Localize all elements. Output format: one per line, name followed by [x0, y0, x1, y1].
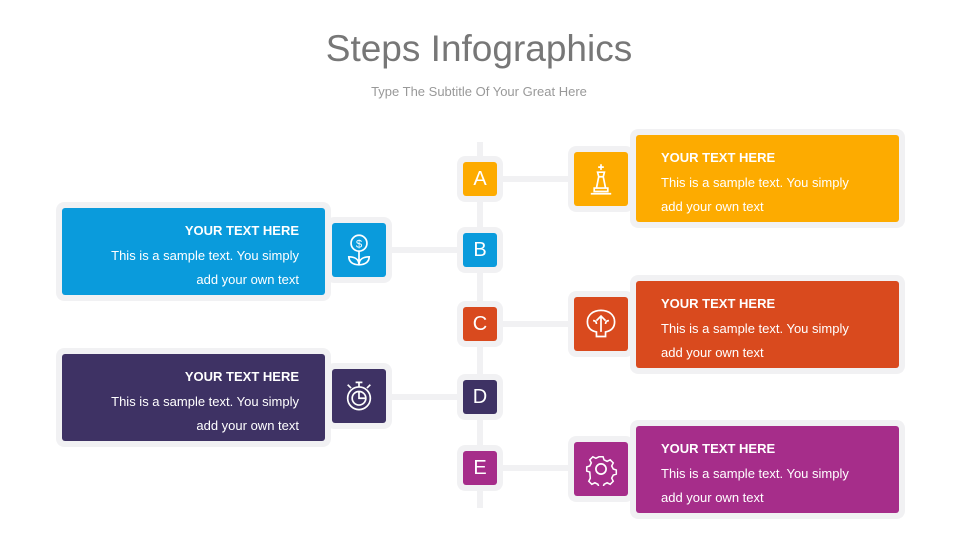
- icon: gear: [574, 442, 628, 496]
- card C: This is a sample text. You simply: [661, 321, 849, 336]
- card D: YOUR TEXT HERE: [185, 369, 299, 384]
- card A: This is a sample text. You simply: [661, 175, 849, 190]
- icon: money plant: [332, 223, 386, 277]
- step C letter: C: [473, 312, 487, 334]
- icon: stopwatch: [332, 369, 386, 423]
- card E: This is a sample text. You simply: [661, 466, 849, 481]
- card C: [636, 281, 899, 368]
- card B: [62, 208, 325, 295]
- card B: This is a sample text. You simply: [111, 248, 299, 263]
- icon: chess king: [574, 152, 628, 206]
- card E: YOUR TEXT HERE: [661, 441, 775, 456]
- step D letter: D: [473, 386, 487, 408]
- card A: YOUR TEXT HERE: [661, 150, 775, 165]
- step A letter: [463, 162, 497, 196]
- step E letter: [463, 451, 497, 485]
- card C: add your own text: [661, 345, 764, 360]
- timeline spine: [477, 142, 483, 508]
- card E: add your own text: [661, 490, 764, 505]
- title: Steps Infographics: [326, 28, 632, 69]
- step E letter: E: [473, 456, 487, 478]
- card B: YOUR TEXT HERE: [185, 223, 299, 238]
- card D: This is a sample text. You simply: [111, 394, 299, 409]
- card C: YOUR TEXT HERE: [661, 296, 775, 311]
- card B: add your own text: [196, 272, 299, 287]
- card E: [636, 426, 899, 513]
- step B letter: B: [473, 238, 487, 260]
- card D: add your own text: [196, 418, 299, 433]
- step C letter: [463, 307, 497, 341]
- step B letter: [463, 233, 497, 267]
- icon: money plant: $: [356, 239, 363, 251]
- step D letter: [463, 380, 497, 414]
- subtitle: Type The Subtitle Of Your Great Here: [371, 84, 587, 99]
- card A: add your own text: [661, 199, 764, 214]
- card A: [636, 135, 899, 222]
- card D: [62, 354, 325, 441]
- icon: brain bulb: [574, 297, 628, 351]
- connectors: [497, 176, 574, 182]
- step A letter: A: [473, 168, 487, 190]
